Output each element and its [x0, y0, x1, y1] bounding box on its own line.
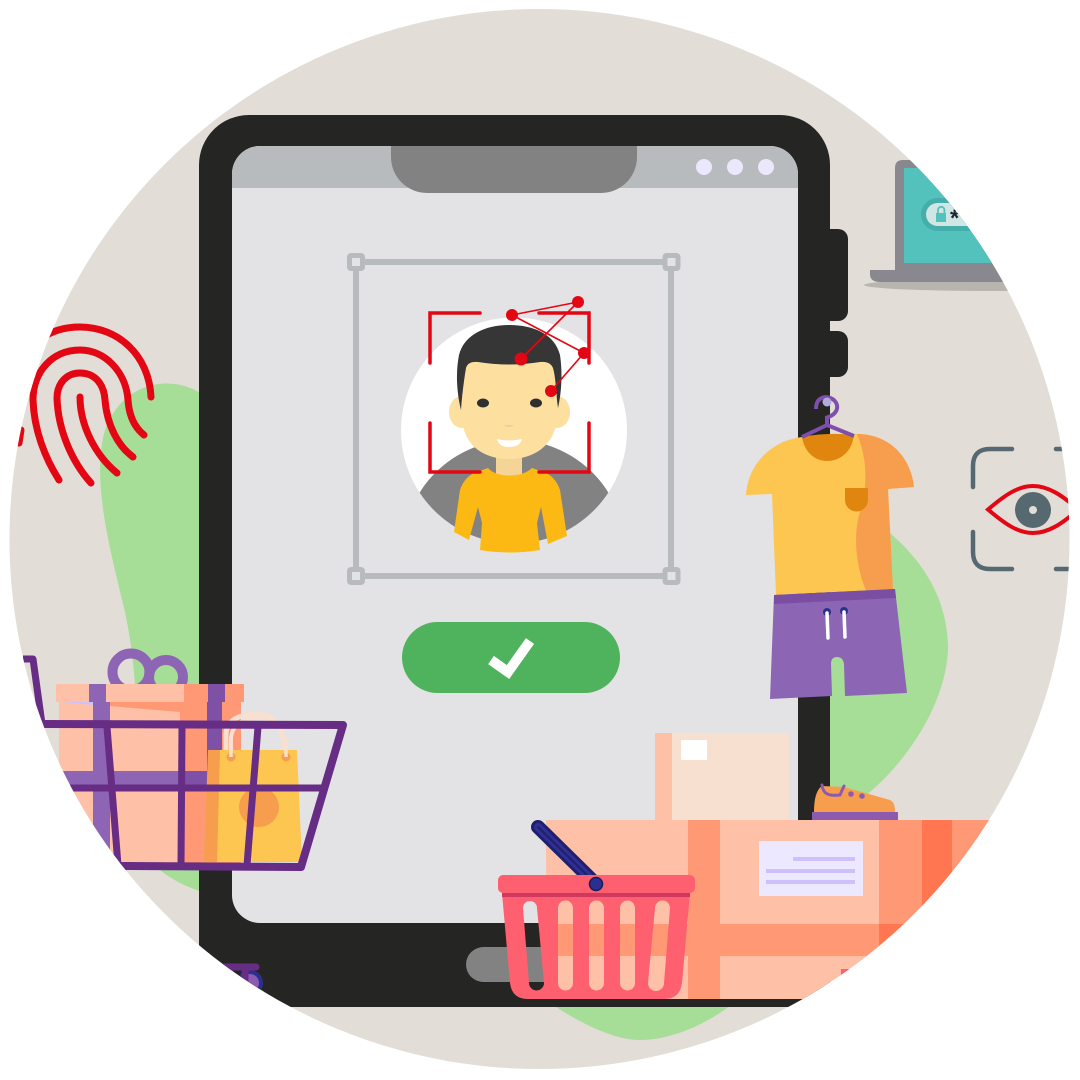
home button: [466, 947, 544, 982]
cart handle: [23, 659, 42, 724]
waistband: [774, 589, 896, 604]
sole: [812, 812, 898, 820]
red shopping basket: [498, 827, 695, 999]
sweater: [454, 468, 567, 552]
face landmark network: [506, 296, 590, 397]
phone screen: [232, 146, 798, 923]
laptop shadow: [864, 280, 1008, 291]
bag grommets: [226, 752, 290, 762]
fingerprint icon: [19, 327, 151, 483]
eye scan icon: [973, 449, 1080, 569]
user portrait: [401, 318, 627, 552]
green blob: right: [830, 534, 948, 794]
check mark: [491, 641, 530, 672]
sneaker: [812, 785, 898, 820]
browser bar: [232, 146, 798, 188]
large parcel: [546, 820, 1069, 999]
camera notch: [391, 146, 637, 193]
shirt shaded side: [856, 434, 914, 591]
t-shirt on hanger: [746, 397, 914, 595]
gift box: [56, 654, 244, 867]
window dots: [696, 159, 774, 175]
face: [462, 358, 557, 459]
phone: [199, 115, 848, 1007]
face detection brackets: [430, 313, 589, 472]
drawstrings: [823, 607, 848, 638]
phone body: [199, 115, 830, 1007]
small parcel: [655, 733, 789, 820]
pupil: [1029, 506, 1037, 514]
hair: [457, 325, 561, 410]
confirm button: [402, 622, 620, 693]
scan brackets: [973, 449, 1080, 569]
gift lid: [56, 684, 244, 702]
basket rim: [498, 875, 695, 893]
lace eyelets: [848, 791, 865, 799]
password asterisk: *: [950, 205, 960, 232]
shirt pocket: [845, 488, 868, 512]
cart bars: [107, 727, 258, 865]
nose: [504, 425, 514, 427]
neck: [496, 458, 522, 476]
gift body: [59, 702, 181, 867]
shipping label: [759, 841, 863, 896]
hanger: [802, 397, 854, 437]
gift bow: [112, 654, 183, 694]
green blob: bottom: [556, 1007, 728, 1040]
shorts: [770, 589, 907, 699]
yellow shopping bag: [204, 714, 302, 862]
cart wheel: [222, 967, 261, 994]
shirt body: [746, 434, 914, 595]
shirt collar: [802, 434, 854, 461]
handle pivot: [590, 878, 602, 890]
basket handle: [538, 827, 594, 882]
gift ribbons: [59, 702, 222, 867]
laptop screen: [904, 168, 992, 263]
purple shopping cart: [23, 659, 343, 867]
basket inner band: [502, 892, 690, 897]
bag handles: [226, 714, 286, 757]
shoe collar: [822, 785, 844, 795]
lock icon: [936, 207, 946, 222]
basket body: [502, 893, 690, 999]
laptop: [864, 160, 1008, 291]
iris: [1015, 492, 1051, 528]
ears: [449, 396, 570, 428]
laptop lid: [895, 160, 996, 270]
red eye outline: [988, 486, 1078, 533]
eyes: [477, 398, 542, 408]
phone side buttons: [830, 229, 848, 377]
shoulders backdrop: [420, 444, 608, 541]
bag circle logo: [239, 787, 279, 827]
bag front: [217, 750, 302, 862]
laptop base: [870, 270, 1003, 282]
smile: [497, 439, 522, 447]
bag side: [204, 750, 221, 862]
lid shadow: [110, 702, 180, 712]
parcel boxes: [546, 733, 1069, 999]
green blob: left: [100, 383, 205, 893]
password field: [921, 198, 971, 231]
face scan frame: [350, 256, 678, 582]
shoe upper: [814, 786, 895, 812]
portrait background: [401, 318, 627, 493]
cart frame: [43, 724, 343, 867]
